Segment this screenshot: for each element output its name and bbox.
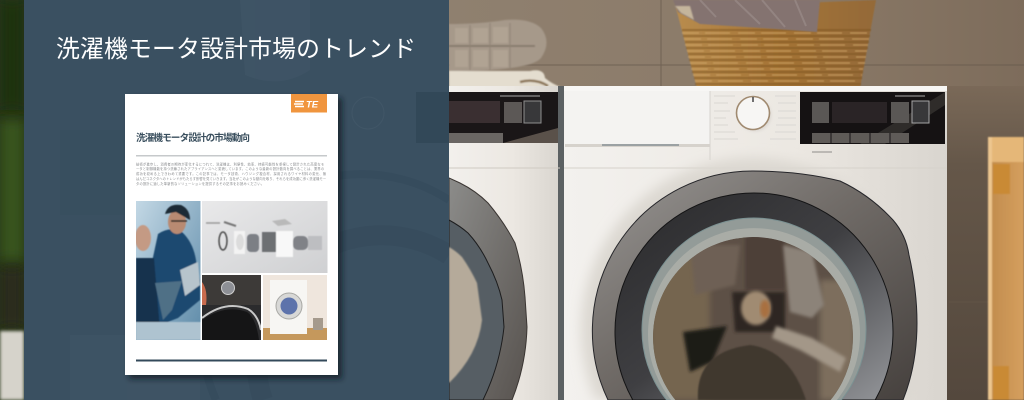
icon: TE logo xyxy=(291,94,327,112)
document body text xyxy=(136,162,327,186)
background photo: laundry room xyxy=(440,0,1024,400)
door shadow halo xyxy=(581,158,925,400)
inner dark ring xyxy=(615,193,893,400)
tiled wall xyxy=(449,0,1024,400)
photo: white washer xyxy=(263,275,327,340)
left strip: blurred plant and cabinet xyxy=(0,0,24,400)
control panel xyxy=(800,92,945,144)
wooden crate xyxy=(988,137,1024,400)
document body text: タの設計に適した革新的なソリューションを提供するその記事をお読みください。 xyxy=(136,181,264,186)
title: 洗濯機モータ設計市場のトレンド xyxy=(56,36,416,63)
glass rim xyxy=(642,218,866,400)
ghosted machine beneath overlay xyxy=(416,92,449,143)
photo: exploded motor xyxy=(202,201,328,273)
icon: woven basket xyxy=(673,0,876,88)
document heading: 洗濯機モータ設計の市場動向 xyxy=(136,132,250,144)
icon: folded towels xyxy=(449,20,563,88)
door xyxy=(449,178,527,400)
document body text: 技術が進歩し、消費者の期待が変化するにつれて、洗濯機は、利便性、効率、持続可能性を重視して設計された高度なモ xyxy=(136,162,324,166)
document body text: ータと制御機能を持つ洗練されたアプライアンスへと変貌しています。このような最新の設計動向を調べることは、業界の xyxy=(136,166,324,171)
detergent drawer xyxy=(565,91,710,160)
icon: selector knob xyxy=(736,96,771,131)
panel: translucent navy overlay xyxy=(24,0,449,400)
photo: dark washer xyxy=(202,275,261,340)
bottom rule xyxy=(136,360,327,362)
icon: TE logo: TE xyxy=(306,100,319,110)
document body text: 成功を収める上できわめて重要です。この記事では、モータ技術、ハウジング複合材、採用されるワイヤ材料の変化、無 xyxy=(136,171,327,176)
photo: engineers xyxy=(135,201,201,340)
page xyxy=(125,94,338,375)
dial labels xyxy=(714,96,796,139)
document cover xyxy=(125,94,338,375)
drum interior xyxy=(650,230,855,400)
left washing machine xyxy=(440,86,564,400)
outer door ring xyxy=(592,171,917,400)
control panel xyxy=(440,92,558,143)
right washing machine xyxy=(564,86,947,400)
document body text: はんだコネクタへのトレンドがもたらす影響を見ていきます。当社がこのような動向を取り、それらを成功裏に導く洗濯機モー xyxy=(136,176,326,181)
door assembly xyxy=(581,158,925,400)
